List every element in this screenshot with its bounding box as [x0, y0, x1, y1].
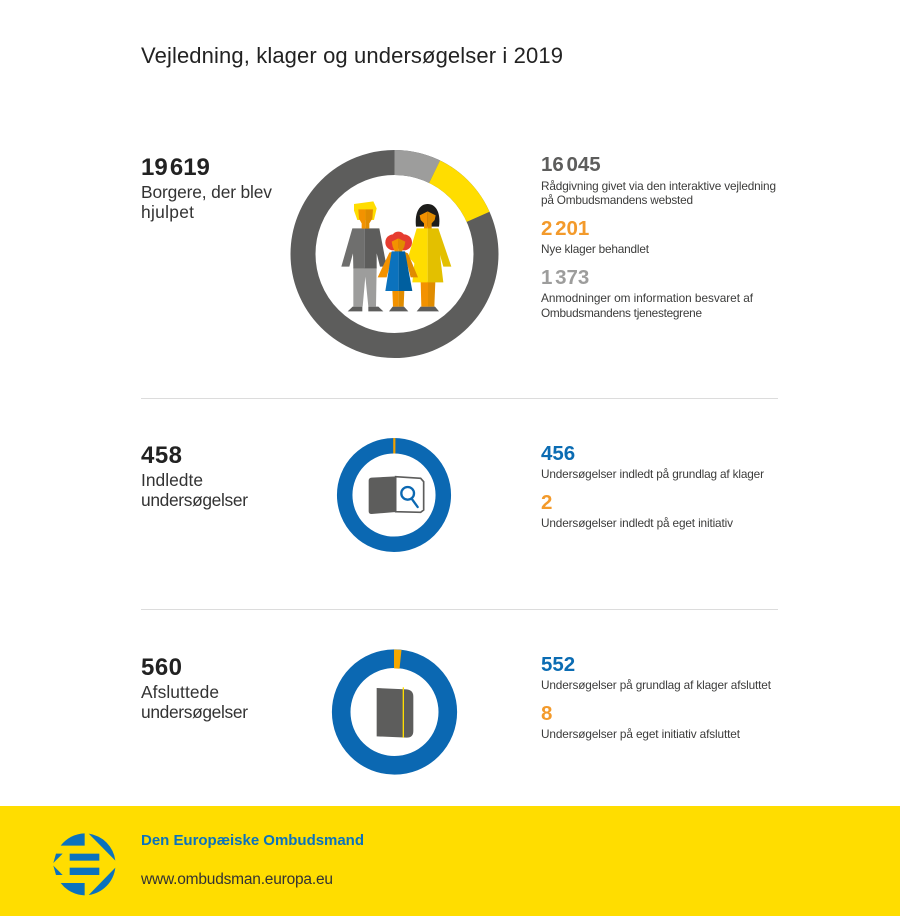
icon: family: [341, 201, 451, 311]
breakdown: 552 from complaints: [541, 653, 772, 692]
breakdown: 456 from complaints: [541, 442, 764, 481]
breakdown: 16 045 guidance: [541, 153, 776, 207]
website: www.ombudsman.europa.eu: [140, 871, 333, 888]
headline: 560 inquiries closed: 560: [141, 654, 182, 681]
footer band: [0, 806, 900, 916]
breakdown: 1 373 requests: Anmodninger om information besvaret af: [541, 291, 754, 305]
donut chart: citizens helped: [303, 162, 486, 346]
donut chart: inquiries closed: [341, 650, 448, 765]
headline: 19 619 citizens: Borgere, der blev: [141, 182, 272, 202]
title: Vejledning, klager og undersøgelser i 2019: [141, 43, 563, 68]
breakdown: 1 373 requests: 1 373: [541, 266, 589, 289]
breakdown: 2 own initiative: Undersøgelser indledt på eget initiativ: [541, 516, 733, 530]
breakdown: 2 own initiative: [541, 491, 733, 530]
breakdown: 552 from complaints: 552: [541, 653, 575, 676]
breakdown: 1 373 requests: [541, 266, 754, 320]
headline: 19 619 citizens: hjulpet: [141, 202, 194, 222]
organisation name: Den Europæiske Ombudsmand: [141, 832, 364, 849]
headline: 560 inquiries closed: [141, 654, 248, 722]
panel: inquiries opened: [141, 438, 764, 544]
breakdown: 16 045 guidance: Rådgivning givet via den interaktive vejledning: [541, 179, 776, 193]
headline: 458 inquiries opened: undersøgelser: [141, 490, 248, 510]
headline: 560 inquiries closed: Afsluttede: [141, 682, 219, 702]
breakdown: 456 from complaints: 456: [541, 442, 575, 465]
breakdown: 8 own initiative: 8: [541, 702, 552, 725]
icon: closed book: [377, 687, 413, 738]
headline: 19 619 citizens: 19 619: [141, 154, 210, 181]
breakdown: 456 from complaints: Undersøgelser indledt på grundlag af klager: [541, 467, 764, 481]
headline: 458 inquiries opened: Indledte: [141, 470, 203, 490]
breakdown: 8 own initiative: Undersøgelser på eget initiativ afsluttet: [541, 727, 741, 741]
breakdown: 2 201 complaints: [541, 217, 650, 256]
donut chart: inquiries opened: [345, 438, 443, 544]
breakdown: 2 201 complaints: Nye klager behandlet: [541, 242, 650, 256]
panel: inquiries closed: [141, 650, 772, 765]
headline: 560 inquiries closed: undersøgelser: [141, 702, 248, 722]
breakdown: 2 201 complaints: 2 201: [541, 217, 589, 240]
breakdown: 8 own initiative: [541, 702, 741, 741]
headline: 458 inquiries opened: 458: [141, 442, 182, 469]
logo: European Ombudsman: [53, 833, 115, 895]
breakdown: 16 045 guidance: på Ombudsmandens websted: [541, 193, 693, 207]
panel: citizens helped: [141, 153, 776, 346]
breakdown: 2 own initiative: 2: [541, 491, 552, 514]
breakdown: 552 from complaints: Undersøgelser på grundlag af klager afsluttet: [541, 678, 772, 692]
breakdown: 1 373 requests: Ombudsmandens tjenestegrene: [541, 306, 702, 320]
breakdown: 16 045 guidance: 16 045: [541, 153, 601, 176]
headline: 19 619 citizens: [141, 154, 272, 222]
headline: 458 inquiries opened: [141, 442, 248, 510]
icon: open book with magnifier: [369, 476, 424, 514]
